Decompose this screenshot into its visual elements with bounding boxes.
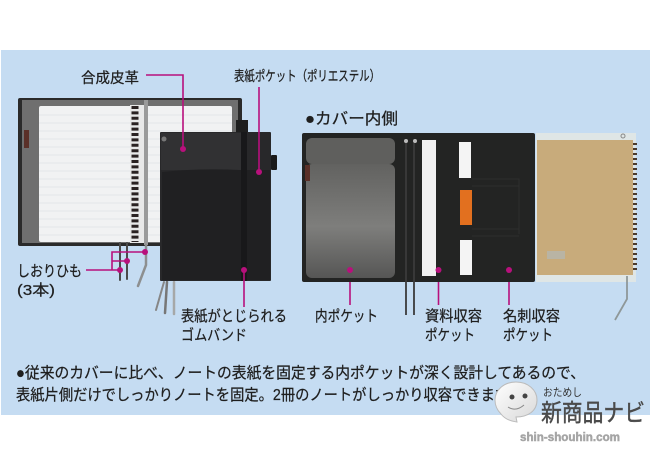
label: document pocket: ポケット [425,327,475,344]
label: inner pocket: 内ポケット [315,308,378,325]
label: document pocket: 資料収容 [425,308,482,325]
kraft notebook [537,140,633,275]
magenta leader lines [86,75,509,307]
ribbons inside [406,143,414,315]
inner pocket [306,138,395,164]
label: elastic band: 表紙がとじられる [181,308,287,325]
elastic band [241,132,247,281]
label: synthetic leather: 合成皮革 [81,70,139,87]
bookmark ribbons [120,243,174,314]
watermark logo: おためし [543,386,582,399]
card pockets [472,179,519,236]
label: bookmark ribbons: (3本) [17,282,55,299]
heading: inside of cover: ●カバー内側 [305,110,398,128]
document slot [422,140,436,276]
spiral binding [132,106,138,242]
label: business card pocket [503,308,560,344]
leader dots [117,146,512,273]
watermark logo [495,382,645,444]
label: elastic band: ゴムバンド [181,326,247,344]
description text: 表紙片側だけでしっかりノートを固定。2冊のノートがしっかり収容できます。 [16,386,522,404]
label: bookmark ribbons [17,263,82,299]
tabs [459,142,471,178]
inside cover spread [302,133,636,320]
description text [16,364,585,404]
closed cover [160,132,277,281]
label: bookmark ribbons: しおりひも [17,263,82,280]
icon: speech bubble character [495,382,537,422]
description text: ●従来のカバーに比べ、ノートの表紙を固定する内ポケットが深く設計してあるので、 [16,364,585,382]
open notebook in cover [18,98,248,246]
ruled paper [39,106,232,242]
label: business card pocket: 名刺収容 [503,308,560,325]
label: document pocket [425,308,482,344]
watermark logo: shin-shouhin.com [520,430,620,444]
label: business card pocket: ポケット [503,327,553,344]
label: cover pocket: 表紙ポケット（ポリエステル） [234,68,380,84]
label: elastic band [181,308,287,344]
